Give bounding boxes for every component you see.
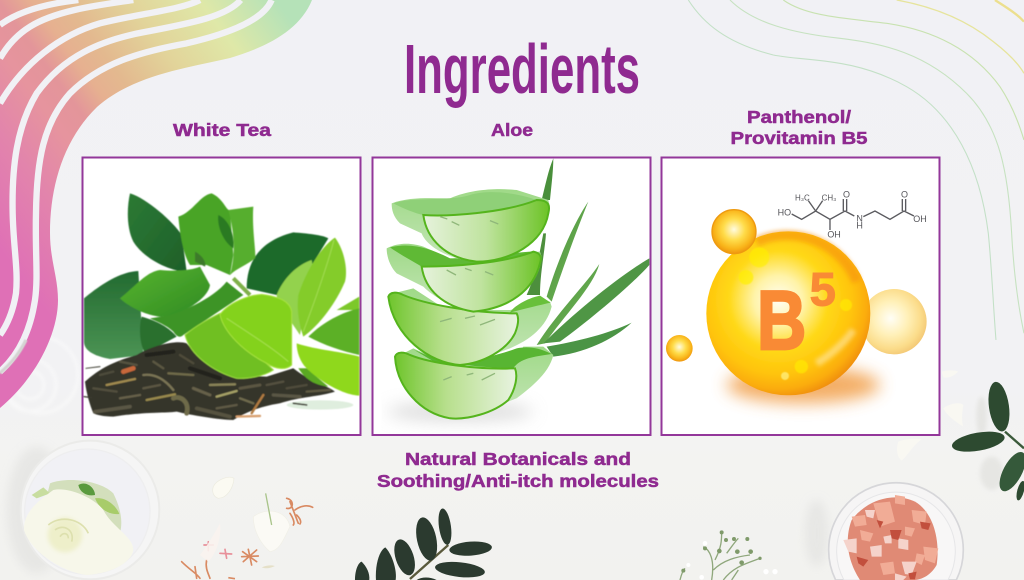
heading: Aloe: Aloe — [491, 120, 533, 140]
panel: aloe — [372, 158, 650, 435]
chemical structure: panthenol: OH — [827, 230, 841, 240]
caption: natural botanicals: Soothing/Anti-itch molecules — [377, 471, 659, 491]
chemical structure: panthenol: O — [901, 190, 908, 200]
heading: Panthenol / Provitamin B5 — [730, 107, 868, 148]
chemical structure: panthenol: OH — [913, 214, 927, 224]
title: Ingredients — [404, 30, 640, 108]
illustration: B5 vitamin spheres: B — [757, 274, 806, 367]
decoration: faint swirl behind ribbons — [2, 337, 78, 413]
heading: White Tea: White Tea — [173, 120, 271, 140]
heading: Panthenol / Provitamin B5: Panthenol/ — [747, 107, 851, 127]
decoration: pink salt in glass dish — [805, 483, 963, 580]
panel: white tea — [82, 158, 360, 435]
chemical structure: panthenol: N — [856, 213, 863, 223]
decoration: left rainbow ribbons — [0, 0, 312, 408]
decoration: white rose in glass bowl — [7, 441, 159, 579]
illustration: B5 vitamin spheres — [666, 210, 927, 403]
chemical structure: panthenol: HO — [778, 207, 791, 217]
decoration: scattered petals and dried flowers — [182, 477, 313, 579]
decoration: green leaf branch right — [897, 370, 1024, 501]
chemical structure: panthenol: H₃C — [795, 193, 810, 202]
chemical structure: panthenol: O — [843, 190, 850, 200]
decoration: right thin wave lines — [688, 0, 1024, 340]
heading: Panthenol / Provitamin B5: Provitamin B5 — [730, 128, 868, 148]
panel: panthenol B5 — [662, 158, 940, 435]
caption: natural botanicals: Natural Botanicals and — [405, 449, 631, 469]
caption: natural botanicals — [377, 449, 659, 491]
illustration: aloe slices and blades — [387, 158, 649, 422]
chemical structure: panthenol — [778, 190, 927, 240]
chemical structure: panthenol: H — [856, 221, 863, 231]
chemical structure: panthenol: CH₃ — [822, 193, 836, 202]
illustration: B5 vitamin spheres: 5 — [810, 263, 836, 316]
illustration: tea leaves and dried tea — [84, 193, 359, 420]
decoration: baby's breath sprig — [680, 530, 778, 580]
decoration: dark leaf sprig bottom center — [355, 508, 492, 580]
